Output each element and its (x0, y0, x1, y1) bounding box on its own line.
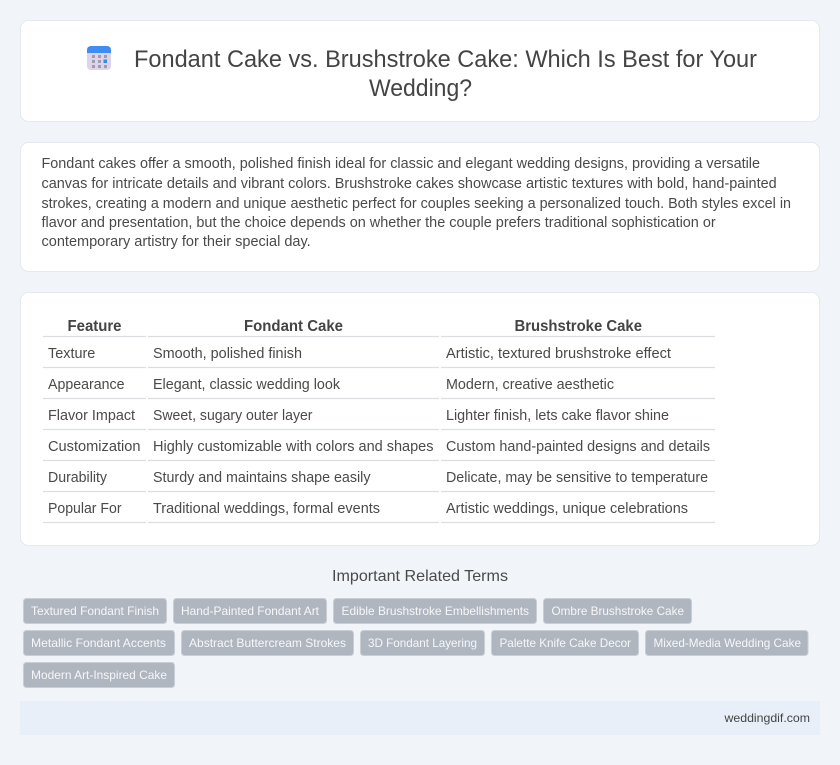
footer: weddingdif.com (723, 711, 810, 725)
row: popular for: Popular For (48, 501, 122, 517)
intro paragraph: flavor and presentation, but the choice depends on whether the couple prefers traditional sophistication or (42, 215, 716, 231)
panel: related term tags (24, 598, 808, 688)
panel: related term tags: Textured Fondant Finish (31, 604, 159, 618)
row: appearance (48, 377, 614, 393)
row: appearance: Appearance (48, 377, 124, 393)
row: durability: Sturdy and maintains shape easily (153, 470, 371, 486)
table header row: Fondant Cake (244, 318, 343, 335)
heading: important related terms: Important Related Terms (332, 568, 508, 585)
table header row: Brushstroke Cake (514, 318, 642, 335)
panel: related term tags: Abstract Buttercream Strokes (189, 636, 346, 650)
row: texture (48, 346, 671, 362)
title (134, 46, 757, 102)
row: texture: Artistic, textured brushstroke effect (446, 346, 671, 362)
panel: related term tags: Edible Brushstroke Embellishments (342, 604, 529, 618)
panel: related term tags: Metallic Fondant Accents (31, 636, 166, 650)
row: texture: Smooth, polished finish (153, 346, 302, 362)
row: customization: Customization (48, 439, 140, 455)
intro paragraph: contemporary artistry for their special day. (42, 234, 311, 250)
row: customization (48, 439, 710, 455)
panel: related term tags: Mixed-Media Wedding Cake (654, 636, 801, 650)
intro paragraph: strokes, creating a modern and unique aesthetic perfect for couples seeking a personalized touch. Both styles excel in (42, 196, 791, 212)
row: popular for: Traditional weddings, formal events (153, 501, 380, 517)
panel: comparison table (20, 292, 820, 546)
panel: related term tags: Modern Art-Inspired Cake (31, 668, 167, 682)
row: flavor impact (48, 408, 669, 424)
footer (20, 701, 820, 735)
title: Wedding? (369, 75, 472, 102)
row: flavor impact: Lighter finish, lets cake flavor shine (446, 408, 669, 424)
row: durability: Delicate, may be sensitive to temperature (446, 470, 708, 486)
panel: related term tags: Hand-Painted Fondant Art (181, 604, 320, 618)
table header row (68, 318, 642, 335)
icon: calendar (87, 46, 111, 70)
intro paragraph: Fondant cakes offer a smooth, polished finish ideal for classic and elegant wedding designs, providing a versatile (42, 156, 760, 172)
row: flavor impact: Sweet, sugary outer layer (153, 408, 313, 424)
row: customization: Highly customizable with colors and shapes (153, 439, 434, 455)
row: texture: Texture (48, 346, 95, 362)
panel: related term tags: Palette Knife Cake Decor (500, 636, 631, 650)
row: durability (48, 470, 708, 486)
row: durability: Durability (48, 470, 108, 486)
row: flavor impact: Flavor Impact (48, 408, 135, 424)
table header row: Feature (68, 318, 122, 335)
row: appearance: Modern, creative aesthetic (446, 377, 614, 393)
panel: related term tags: 3D Fondant Layering (368, 636, 477, 650)
row: popular for (48, 501, 688, 517)
title: Fondant Cake vs. Brushstroke Cake: Which Is Best for Your (134, 46, 757, 73)
row: popular for: Artistic weddings, unique celebrations (446, 501, 688, 517)
panel: header (20, 20, 820, 122)
intro paragraph: canvas for intricate details and vibrant colors. Brushstroke cakes showcase artistic textures with bold, hand-painted (42, 176, 777, 192)
panel: intro text (20, 142, 820, 272)
intro paragraph (42, 156, 791, 250)
row: customization: Custom hand-painted designs and details (446, 439, 710, 455)
row: appearance: Elegant, classic wedding look (153, 377, 341, 393)
panel: related term tags: Ombre Brushstroke Cake (552, 604, 684, 618)
